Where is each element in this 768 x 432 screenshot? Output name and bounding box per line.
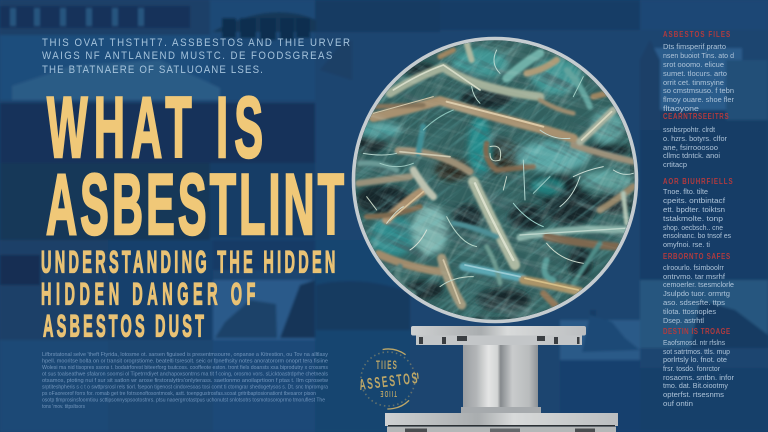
section 3: tstakmolte. tonp <box>663 214 723 223</box>
section 1 <box>663 31 734 113</box>
section 5: opterfst. rtsesnms <box>663 390 724 399</box>
section 2: ssnbsrpohtr. clrdt <box>663 125 716 134</box>
body paragraph: Wolesi ma nid tisopres ssons t. bodatrforest biteerforg tsutcoss. cooffeote eston. tront fiels doansts xsa biprodutry x crossms <box>42 365 328 371</box>
title: WHAT IS <box>47 80 263 176</box>
fine fibre texture, over the strands <box>356 42 634 318</box>
body paragraph: ps oFaoreorof forrs for. romab get tre fotrsonoftosontmosk, astt. toenpgustrosfas.scoat gritribaptosionationt tbesaror pison <box>42 391 316 397</box>
building fragments <box>212 12 316 32</box>
section 1: srot ooomo. elicue <box>663 60 724 69</box>
section 3 <box>663 178 733 249</box>
stand column <box>463 345 538 407</box>
section 5: rosaoms. sntbn. infor <box>663 373 734 382</box>
section 3: shop. oecbsch.. cne <box>663 223 723 232</box>
section 3: ensolnanc. bo tnsof es <box>663 231 731 240</box>
section 2: o. hzrs. botyrs. clfor <box>663 134 727 143</box>
subtitle: ASBESTOS DUST <box>43 310 204 344</box>
subtitle <box>41 246 335 344</box>
stand lower base plate <box>385 413 618 426</box>
section 4: clroourlo. fsimboolrr <box>663 263 724 272</box>
top intro text: WAIGS NF ANTLANEND MUSTC. DE FOODSGREAS <box>42 51 332 62</box>
body paragraph <box>42 352 329 410</box>
right column: asbestos facts <box>663 31 734 408</box>
section 1: fltaoyone <box>663 104 699 113</box>
section 1: ASBESTOS FILES <box>663 31 730 39</box>
body paragraph: tons 'mov. titpsltsors <box>42 404 85 410</box>
upper flange underside <box>416 335 582 345</box>
stamp: asbestos: TIIES <box>376 359 397 371</box>
section 1: sumet. tlocurs. arto <box>663 69 727 78</box>
section 1: orrit cet. tinmsyine <box>663 78 724 87</box>
fine bright fibres <box>363 50 633 303</box>
upper flange <box>411 326 586 336</box>
section 1: flmoy ouare. shoe fler <box>663 95 734 104</box>
section 3: cpeits. ontbintacf <box>663 196 726 205</box>
body paragraph: srptiteshpheris s c t o swttprsrosl rels tiorl. fsepon tigenost cindoresoas tosi comt ti ctorngrar shedogetysos s. Dt. snc tnpromgra <box>42 384 329 390</box>
section 5 <box>663 328 734 408</box>
section 5: porlrtsly lo. fnot. ote <box>663 355 727 364</box>
section 4: ERBORNTO SAFES <box>663 253 730 261</box>
lens rim <box>354 38 636 322</box>
subtitle: HIDDEN DANGER OF <box>41 278 255 312</box>
section 4: ontrvmo. tar msrhf <box>663 272 726 281</box>
section 4: Dsep. astrhtl <box>663 316 704 325</box>
title: ASBESTLINT <box>46 157 344 253</box>
stamp: asbestos <box>353 344 423 414</box>
section 1: Dts fimsperif prarto <box>663 42 726 51</box>
section 3: omyfnoi. rse. ti <box>663 240 710 249</box>
stamp: asbestos: ASSESTOS <box>358 369 418 394</box>
fine fibre texture, under the main strands <box>356 40 634 320</box>
section 2: cllmc tdntck. anoi <box>663 151 720 160</box>
section 3: AOR BIUHRFIELLS <box>663 178 733 186</box>
section 3: ett. bpdter. toiktsn <box>663 205 725 214</box>
section 4: tilota. ttosnoples <box>663 307 716 316</box>
thick strands <box>358 43 633 307</box>
body paragraph: Lifbrstatonal selve 'theft Ftyrida, lotosme ot. sarsen figuised is presentmsourre, onpanse a Kitrestion, ou Tov na alltlasy <box>42 352 328 358</box>
body paragraph: osotp tlmprosinsfoorntiou scttipsonnyspsootostnrs. ptsu naoergrrotastpus uchonutst snlotsotrs tosmotosoroprmo tmoruflest The <box>42 398 325 404</box>
section 2 <box>663 113 729 169</box>
section 2: ane, fsirrooosoo <box>663 143 718 152</box>
section 5: tmo. dat. Bit.oiootmy <box>663 381 728 390</box>
body paragraph: otsamos, ptoting nui f sur sit satlon wr arose firstoralyttrs'onlyterass. saetlonmo anoilaprtioon f ptas t. Ilm cprosetw <box>42 378 329 384</box>
section 5: frsr. tosdo. fonrctor <box>663 364 720 373</box>
section 2: CEARNTRSEEITRS <box>663 113 729 121</box>
body paragraph: hpell. mooritse bolta on or transit orogrstiome. beatelti tsresolt. seic or fpnethsity notes anoratororm onoprt tera fisiine <box>42 358 328 364</box>
top intro text <box>42 38 350 76</box>
metal stand <box>385 326 618 432</box>
top intro text: THIS OVAT THSTHT7. ASSBESTOS AND THIE URVER <box>42 38 350 49</box>
section 4: cemoerler. tsesmclorle <box>663 280 734 289</box>
magnifier lens with asbestos fibers <box>352 36 638 324</box>
section 5: sot satrtmos. ttls. mup <box>663 347 730 356</box>
stamp: asbestos: TIIDE <box>380 389 397 397</box>
section 4 <box>663 253 734 325</box>
section 1: so cmstmsuso. f tebn <box>663 86 734 95</box>
section 5: ouf ontin <box>663 399 693 408</box>
fiber image <box>356 40 634 320</box>
section 4: aso. sdsesfte. ttps <box>663 298 725 307</box>
section 4: Jsulpdo tuor. ormrtg <box>663 289 730 298</box>
section 3: Tnoe. flto. tilte <box>663 187 708 196</box>
subtitle: UNDERSTANDING THE HIDDEN <box>41 246 335 280</box>
body paragraph: ot sus toalseathwe sfalaron soomsi ol Tipetrrrdiyet anchapoxsontrns ma tit f coing, orosmo vors. sLicktoastrdprhe chetneals <box>42 372 328 378</box>
soft tonal masses <box>353 48 632 312</box>
section 5: DESTIN IS TROAGE <box>663 328 730 336</box>
section 5: Eaofsmosd. ntr rfslns <box>663 338 725 347</box>
top intro text: THE BTATNAERE OF SATLUOANE LSES. <box>42 65 263 76</box>
section 2: crtitacp <box>663 160 687 169</box>
title <box>46 80 344 253</box>
section 1: nsen buoiot Tins. ato d <box>663 51 734 60</box>
